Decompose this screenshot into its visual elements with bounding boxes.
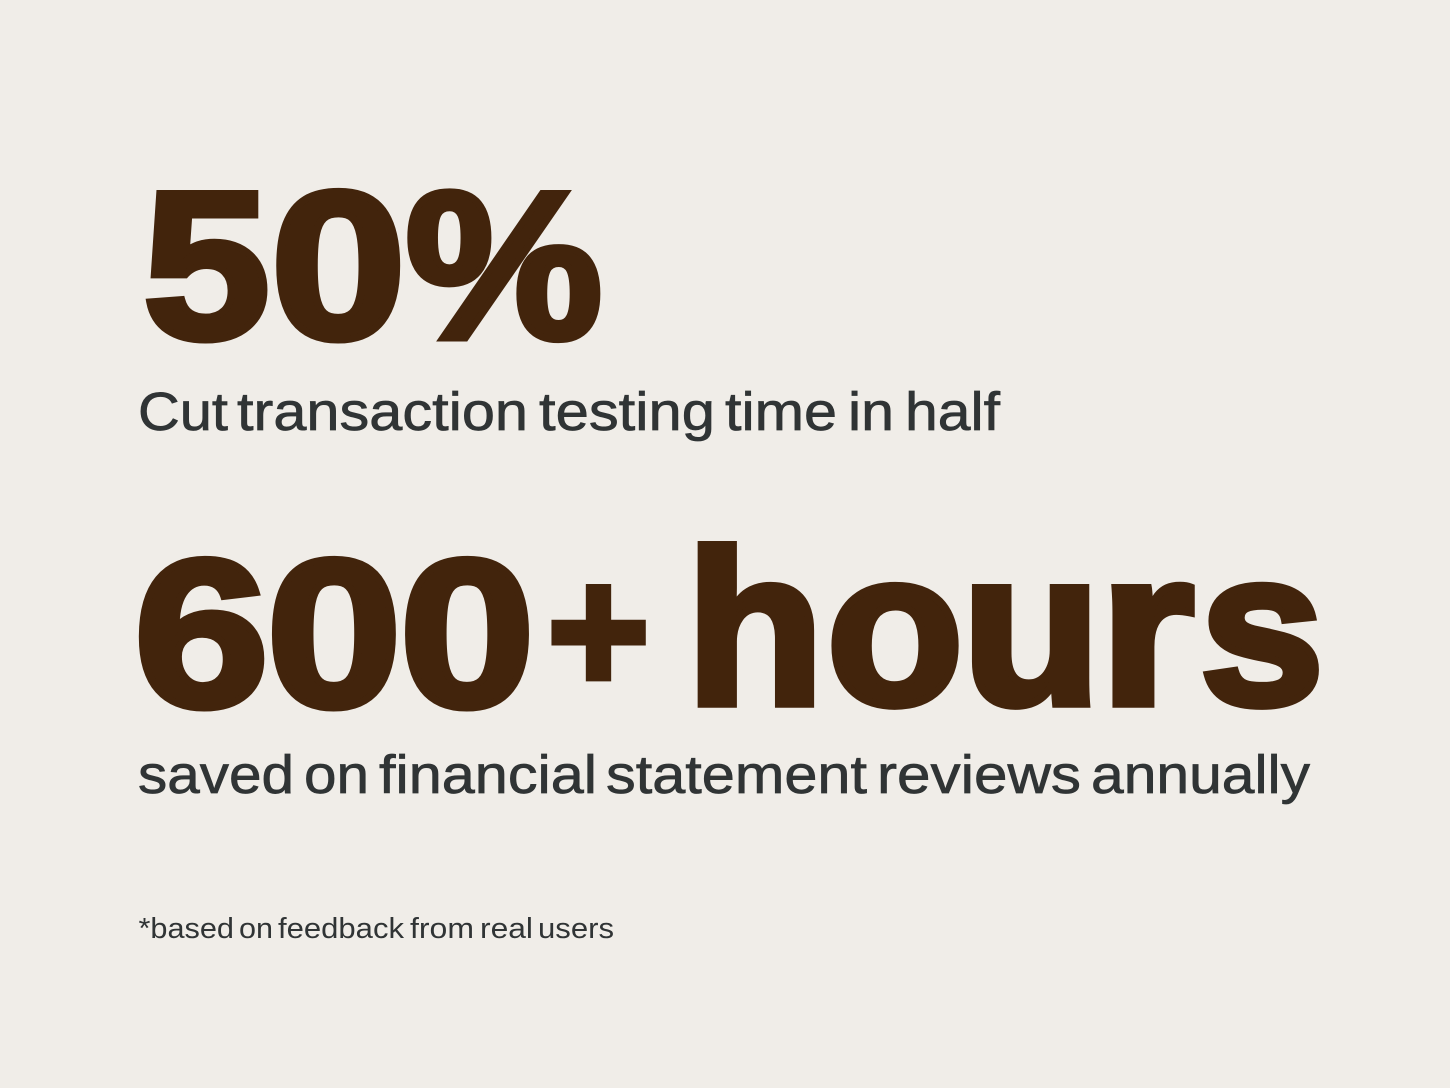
caption: financial statement reviews: financial <box>379 745 597 805</box>
caption: transaction testing: Cut <box>138 382 228 442</box>
caption: transaction testing: transaction <box>237 382 528 442</box>
stat: 600+ hours: 0 <box>266 516 402 751</box>
footnote: on <box>239 913 273 945</box>
stat: 600+ hours: o <box>827 507 963 751</box>
footnote: feedback <box>278 913 405 945</box>
footnote <box>138 913 614 945</box>
stat: 600+ hours: u <box>962 507 1101 751</box>
stat: 600+ hours: 6 <box>134 516 269 751</box>
caption: financial statement reviews: reviews <box>877 745 1081 805</box>
caption: transaction testing: testing <box>539 382 715 442</box>
caption: transaction testing: half <box>905 382 1001 442</box>
caption: transaction testing <box>138 382 1001 442</box>
caption: financial statement reviews: statement <box>606 745 867 805</box>
caption: transaction testing: in <box>848 382 894 442</box>
footnote: *based <box>138 913 234 945</box>
caption: financial statement reviews <box>138 745 1310 805</box>
footnote: from <box>410 913 474 945</box>
caption: financial statement reviews: annually <box>1091 745 1310 805</box>
caption: financial statement reviews: saved <box>138 745 294 805</box>
stat: 50%: 0 <box>271 148 406 383</box>
stat: 600+ hours: r <box>1100 507 1194 751</box>
stat: 600+ hours: + <box>547 530 650 732</box>
stat: 50%: 5 <box>143 148 270 383</box>
stat: 600+ hours <box>134 507 1324 751</box>
stat: 600+ hours: s <box>1200 507 1324 751</box>
stat: 50%: % <box>406 148 602 383</box>
stat: 600+ hours: 0 <box>400 516 535 751</box>
caption: financial statement reviews: on <box>304 745 369 805</box>
caption: transaction testing: time <box>725 382 837 442</box>
footnote: real <box>480 913 533 945</box>
stat: 50% <box>143 148 602 383</box>
stat: 600+ hours: h <box>686 507 824 751</box>
footnote: users <box>538 913 614 945</box>
